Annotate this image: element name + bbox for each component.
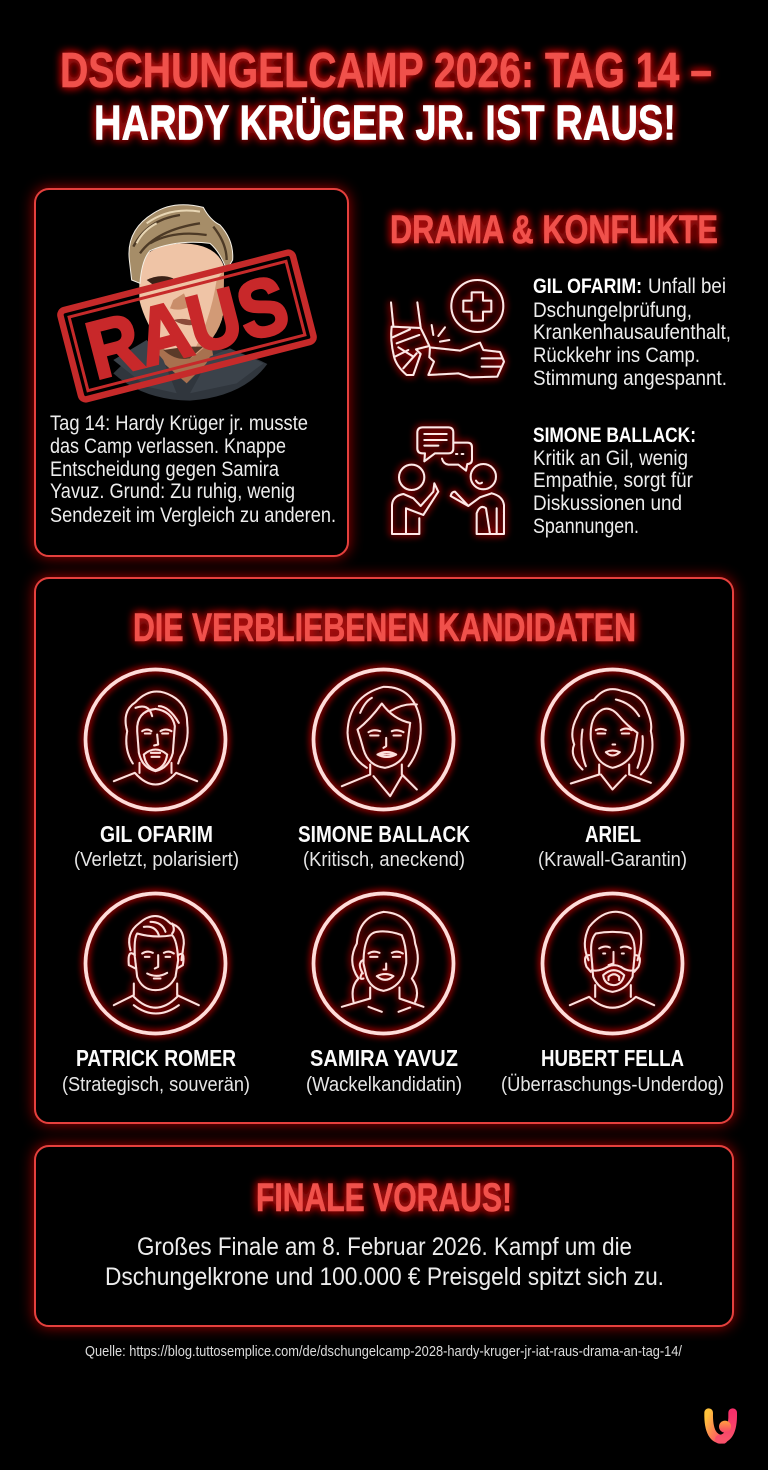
descriptor: Gil Ofarim: (Verletzt, polarisiert)	[74, 848, 239, 871]
avatar: Patrick Romer	[86, 894, 225, 1033]
text: Gil Ofarim conflict: Krankenhausaufenthalt,	[533, 321, 731, 344]
avatar: Ariel	[543, 670, 682, 809]
text: Simone Ballack conflict: Spannungen.	[533, 515, 639, 538]
text: Gil Ofarim conflict: GIL OFARIM:	[533, 275, 642, 298]
source line: Quelle: https://blog.tuttosemplice.com/de/dschungelcamp-2028-hardy-kruger-jr-iat-raus-drama-an-tag-14/	[85, 1344, 683, 1360]
icon: two people arguing	[392, 427, 504, 534]
avatar: Simone Ballack	[314, 670, 453, 809]
text: Simone Ballack conflict: Diskussionen und	[533, 492, 682, 515]
text: exit description: Yavuz. Grund: Zu ruhig, wenig	[50, 480, 295, 503]
text: Simone Ballack conflict	[533, 424, 696, 538]
text: exit description: Entscheidung gegen Samira	[50, 458, 279, 481]
name label: GIL OFARIM	[100, 821, 213, 847]
name label: ARIEL	[585, 821, 641, 847]
text: exit description: das Camp verlassen. Knappe	[50, 435, 286, 458]
stamp: RAUS: RAUS	[78, 259, 297, 397]
text: Gil Ofarim conflict: Rückkehr ins Camp.	[533, 344, 700, 367]
avatar: Samira Yavuz	[314, 894, 453, 1033]
text: Gil Ofarim conflict	[533, 275, 731, 390]
icon: injured arm with medical cross	[391, 280, 504, 377]
avatar: Gil Ofarim	[86, 670, 225, 809]
text: Simone Ballack conflict: SIMONE BALLACK:	[533, 424, 696, 447]
panel: remaining candidates	[35, 578, 733, 1123]
name label: SAMIRA YAVUZ	[310, 1045, 458, 1071]
text: exit description	[50, 412, 336, 527]
text: finale details: Dschungelkrone und 100.000 € Preisgeld spitzt sich zu.	[105, 1263, 664, 1291]
descriptor: Simone Ballack: (Kritisch, aneckend)	[303, 848, 465, 871]
descriptor: Samira Yavuz: (Wackelkandidatin)	[306, 1073, 462, 1096]
descriptor: Patrick Romer: (Strategisch, souverän)	[62, 1073, 250, 1096]
avatar: Hubert Fella	[543, 894, 682, 1033]
text: exit description: Sendezeit im Vergleich zu anderen.	[50, 504, 336, 527]
title	[60, 44, 712, 150]
candidate: Ariel	[543, 670, 682, 847]
name label: SIMONE BALLACK	[298, 821, 470, 847]
text: Gil Ofarim conflict: Dschungelprüfung,	[533, 299, 692, 322]
heading: Finale voraus: FINALE VORAUS!	[256, 1176, 512, 1220]
descriptor: Hubert Fella: (Überraschungs-Underdog)	[501, 1073, 724, 1096]
descriptor: Ariel: (Krawall-Garantin)	[538, 848, 687, 871]
name label: HUBERT FELLA	[541, 1045, 684, 1071]
candidate: Simone Ballack	[298, 670, 470, 847]
text: finale details	[105, 1233, 664, 1291]
name label: PATRICK ROMER	[76, 1045, 236, 1071]
text: Simone Ballack conflict: Empathie, sorgt für	[533, 469, 693, 492]
text: finale details: Großes Finale am 8. Februar 2026. Kampf um die	[137, 1233, 632, 1261]
panel: Hardy Krüger portrait and exit text	[35, 189, 348, 556]
text: Gil Ofarim conflict: Unfall bei	[648, 275, 726, 298]
candidate: Samira Yavuz	[310, 894, 458, 1071]
icon: logo	[709, 1413, 733, 1439]
panel: Finale voraus	[35, 1146, 733, 1326]
text: Gil Ofarim conflict: Stimmung angespannt.	[533, 367, 727, 390]
candidate: Gil Ofarim	[86, 670, 225, 847]
portrait: Hardy Krüger jr. with RAUS stamp	[59, 205, 315, 401]
text: exit description: Tag 14: Hardy Krüger jr. musste	[50, 412, 308, 435]
candidate: Hubert Fella	[541, 894, 684, 1071]
text: Simone Ballack conflict: Kritik an Gil, wenig	[533, 447, 688, 470]
candidate: Patrick Romer	[76, 894, 236, 1071]
